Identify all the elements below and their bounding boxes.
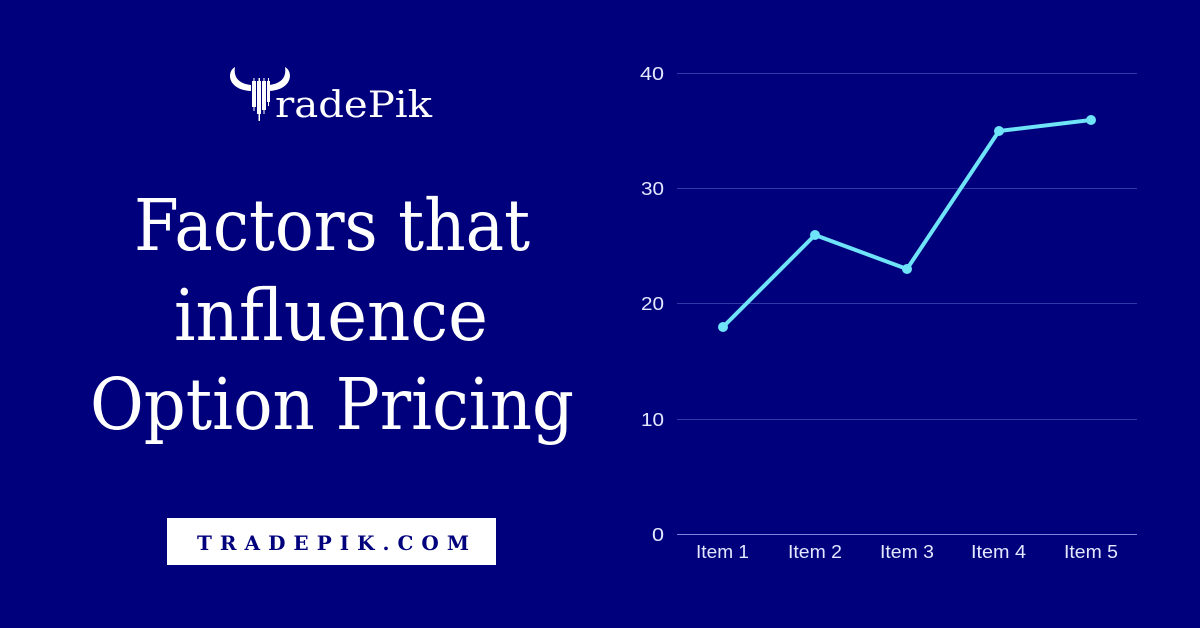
- title: influence: [174, 274, 488, 357]
- y-axis labels: 10: [641, 410, 664, 430]
- x-axis labels: Item 5: [1064, 542, 1118, 562]
- y-axis labels: 20: [641, 294, 664, 314]
- y-axis labels: 0: [652, 525, 664, 545]
- icon: bull horns with candlesticks: [230, 67, 290, 121]
- x-axis labels: [696, 542, 1118, 562]
- line chart: [640, 64, 1137, 562]
- x-axis labels: Item 2: [788, 542, 842, 562]
- logo wordmark: radePik: [275, 85, 433, 126]
- y-axis labels: 30: [641, 179, 664, 199]
- data points: [718, 115, 1096, 332]
- data line: [723, 120, 1091, 327]
- x-axis labels: Item 1: [696, 542, 749, 562]
- title: Factors that: [134, 184, 530, 267]
- logo: TradePik: [230, 67, 433, 126]
- x-axis labels: Item 3: [880, 542, 934, 562]
- website badge: TRADEPIK.COM: [197, 531, 469, 555]
- y-axis labels: [640, 64, 664, 545]
- x-axis labels: Item 4: [971, 542, 1026, 562]
- title: [90, 184, 574, 446]
- y-axis labels: 40: [640, 64, 664, 84]
- grid lines: [677, 74, 1137, 534]
- website badge: [167, 518, 496, 565]
- title: Option Pricing: [90, 363, 574, 446]
